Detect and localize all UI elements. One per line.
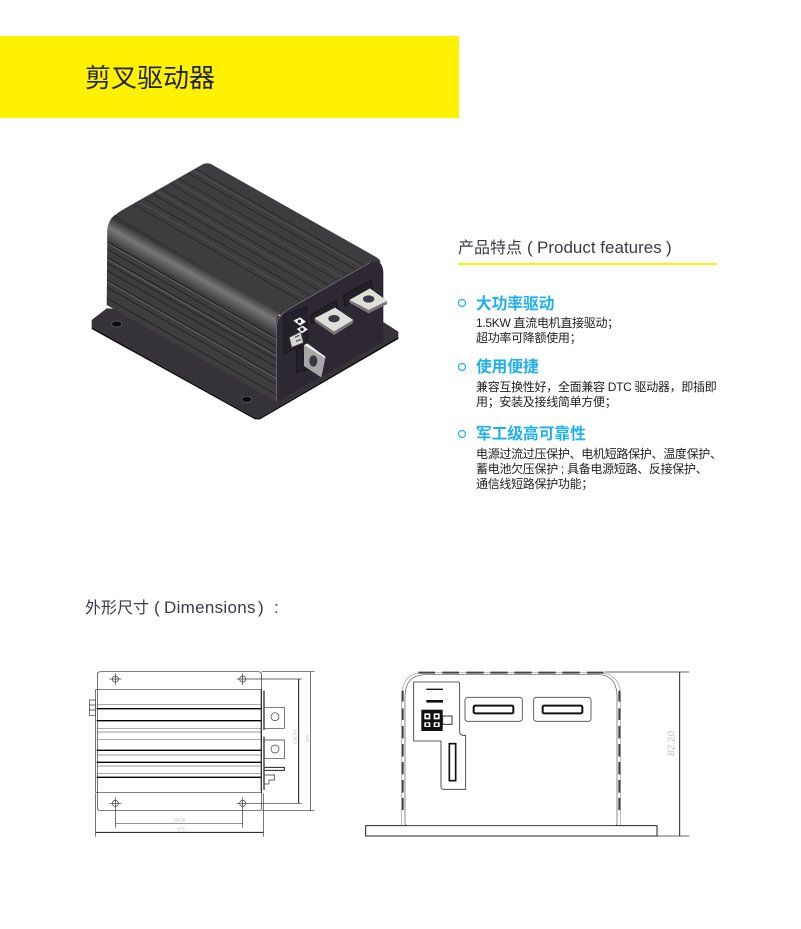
section heading: dimensions: Dimensions [164,598,256,617]
title: 剪叉驱动器 [85,63,215,93]
section heading: product features: ( [527,238,533,257]
feature: military grade reliability: 军工级高可靠性 [476,424,586,443]
product image: controller 3D render [92,163,398,419]
housing front face [277,261,383,402]
feature: military grade reliability: 通信线短路保护功能； [476,475,593,492]
height dimension [605,672,689,836]
title banner [0,36,459,118]
control connector [289,317,308,347]
base plate outline [97,672,262,811]
feature: easy to use [458,358,716,410]
four-pin connector [421,710,452,731]
feature: military grade reliability: 电源过流过压保护、电机短路保护、温度保护、 [476,446,722,461]
section heading: dimensions: ( [154,598,160,617]
terminal tab 2 [349,288,387,313]
section heading: dimensions: : [274,598,279,617]
section heading: dimensions: 外形尺寸 [85,599,149,617]
dimension lines: 133.30 [173,817,186,822]
power terminal slot 1 [465,697,522,721]
terminal tab 1 [314,308,353,335]
feature: easy to use: 使用便捷 [476,358,539,376]
feature: high power [458,294,619,346]
feature: high power: 1.5KW 直流电机直接驱动； [476,314,619,331]
base plate [366,826,657,836]
section heading: product features: ) [666,238,672,257]
mounting base plate [92,308,398,419]
housing outline [402,673,621,826]
section heading: dimensions: ) [258,598,264,617]
height dimension: 82.20 [666,730,677,756]
terminals [265,707,284,784]
dimension lines: 130.30 [293,730,298,744]
mounting holes [109,673,249,809]
dimension lines: 175 [177,826,185,831]
control panel cutout [414,682,466,789]
housing long side face [107,215,280,402]
terminal tab 3 [304,343,325,377]
dimension lines: 145 [305,734,310,743]
power terminal slot 2 [534,697,591,721]
dimension drawing: end view [366,672,689,836]
feature: easy to use: 用；安装及接线简单方便； [476,393,616,410]
feature: high power: 大功率驱动 [476,294,554,313]
section heading: dimensions [85,598,279,617]
section heading: product features [458,238,717,265]
feature: easy to use: 兼容互换性好，全面兼容 DTC 驱动器，即插即 [476,378,716,395]
housing top face [113,163,380,315]
section heading: product features: Product features [537,238,662,257]
side connector [89,700,96,715]
feature: military grade reliability: 蓄电池欠压保护 ; 具备电源短路、反接保护、 [476,461,707,476]
dimension lines [96,672,314,837]
dimension drawing: top view [89,672,314,837]
housing fins [403,673,619,810]
feature: military grade reliability [458,424,722,492]
section heading: product features: 产品特点 [458,239,522,257]
housing body and fins [96,689,264,793]
feature: high power: 超功率可降额使用； [476,329,581,346]
